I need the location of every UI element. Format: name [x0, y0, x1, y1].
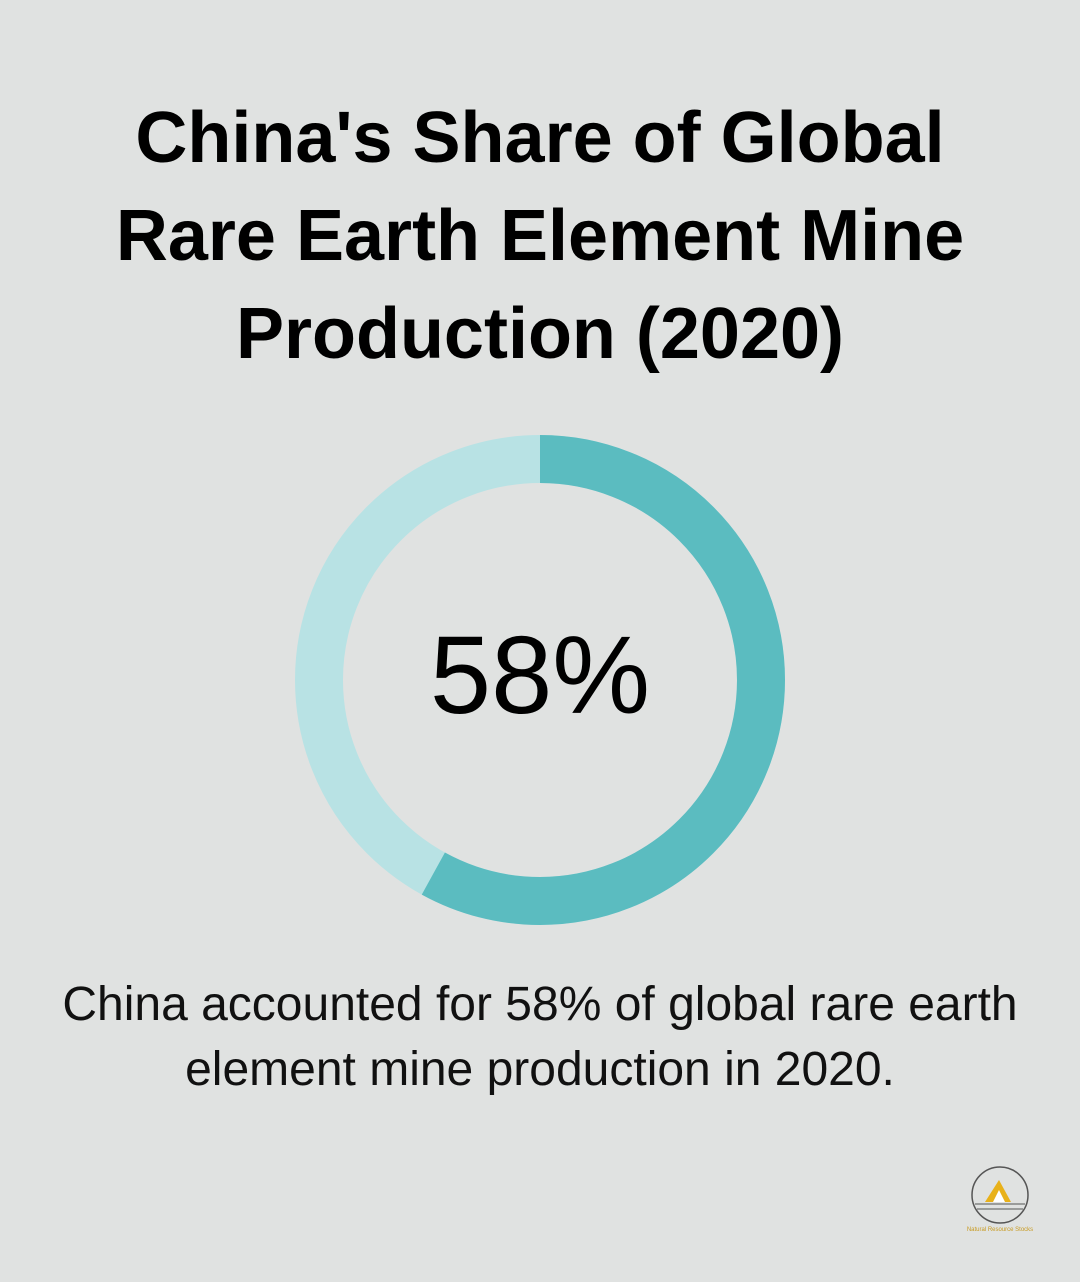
- description: [62, 978, 1018, 1096]
- title: Rare Earth Element Mine: [116, 196, 964, 276]
- title: Production (2020): [236, 294, 844, 374]
- title: China's Share of Global: [135, 98, 945, 178]
- title: [116, 98, 964, 374]
- donut chart: 58%: [430, 614, 650, 737]
- logo: [967, 1166, 1033, 1233]
- description: element mine production in 2020.: [185, 1043, 895, 1096]
- logo: Natural Resource Stocks: [967, 1227, 1033, 1233]
- description: China accounted for 58% of global rare earth: [62, 978, 1018, 1031]
